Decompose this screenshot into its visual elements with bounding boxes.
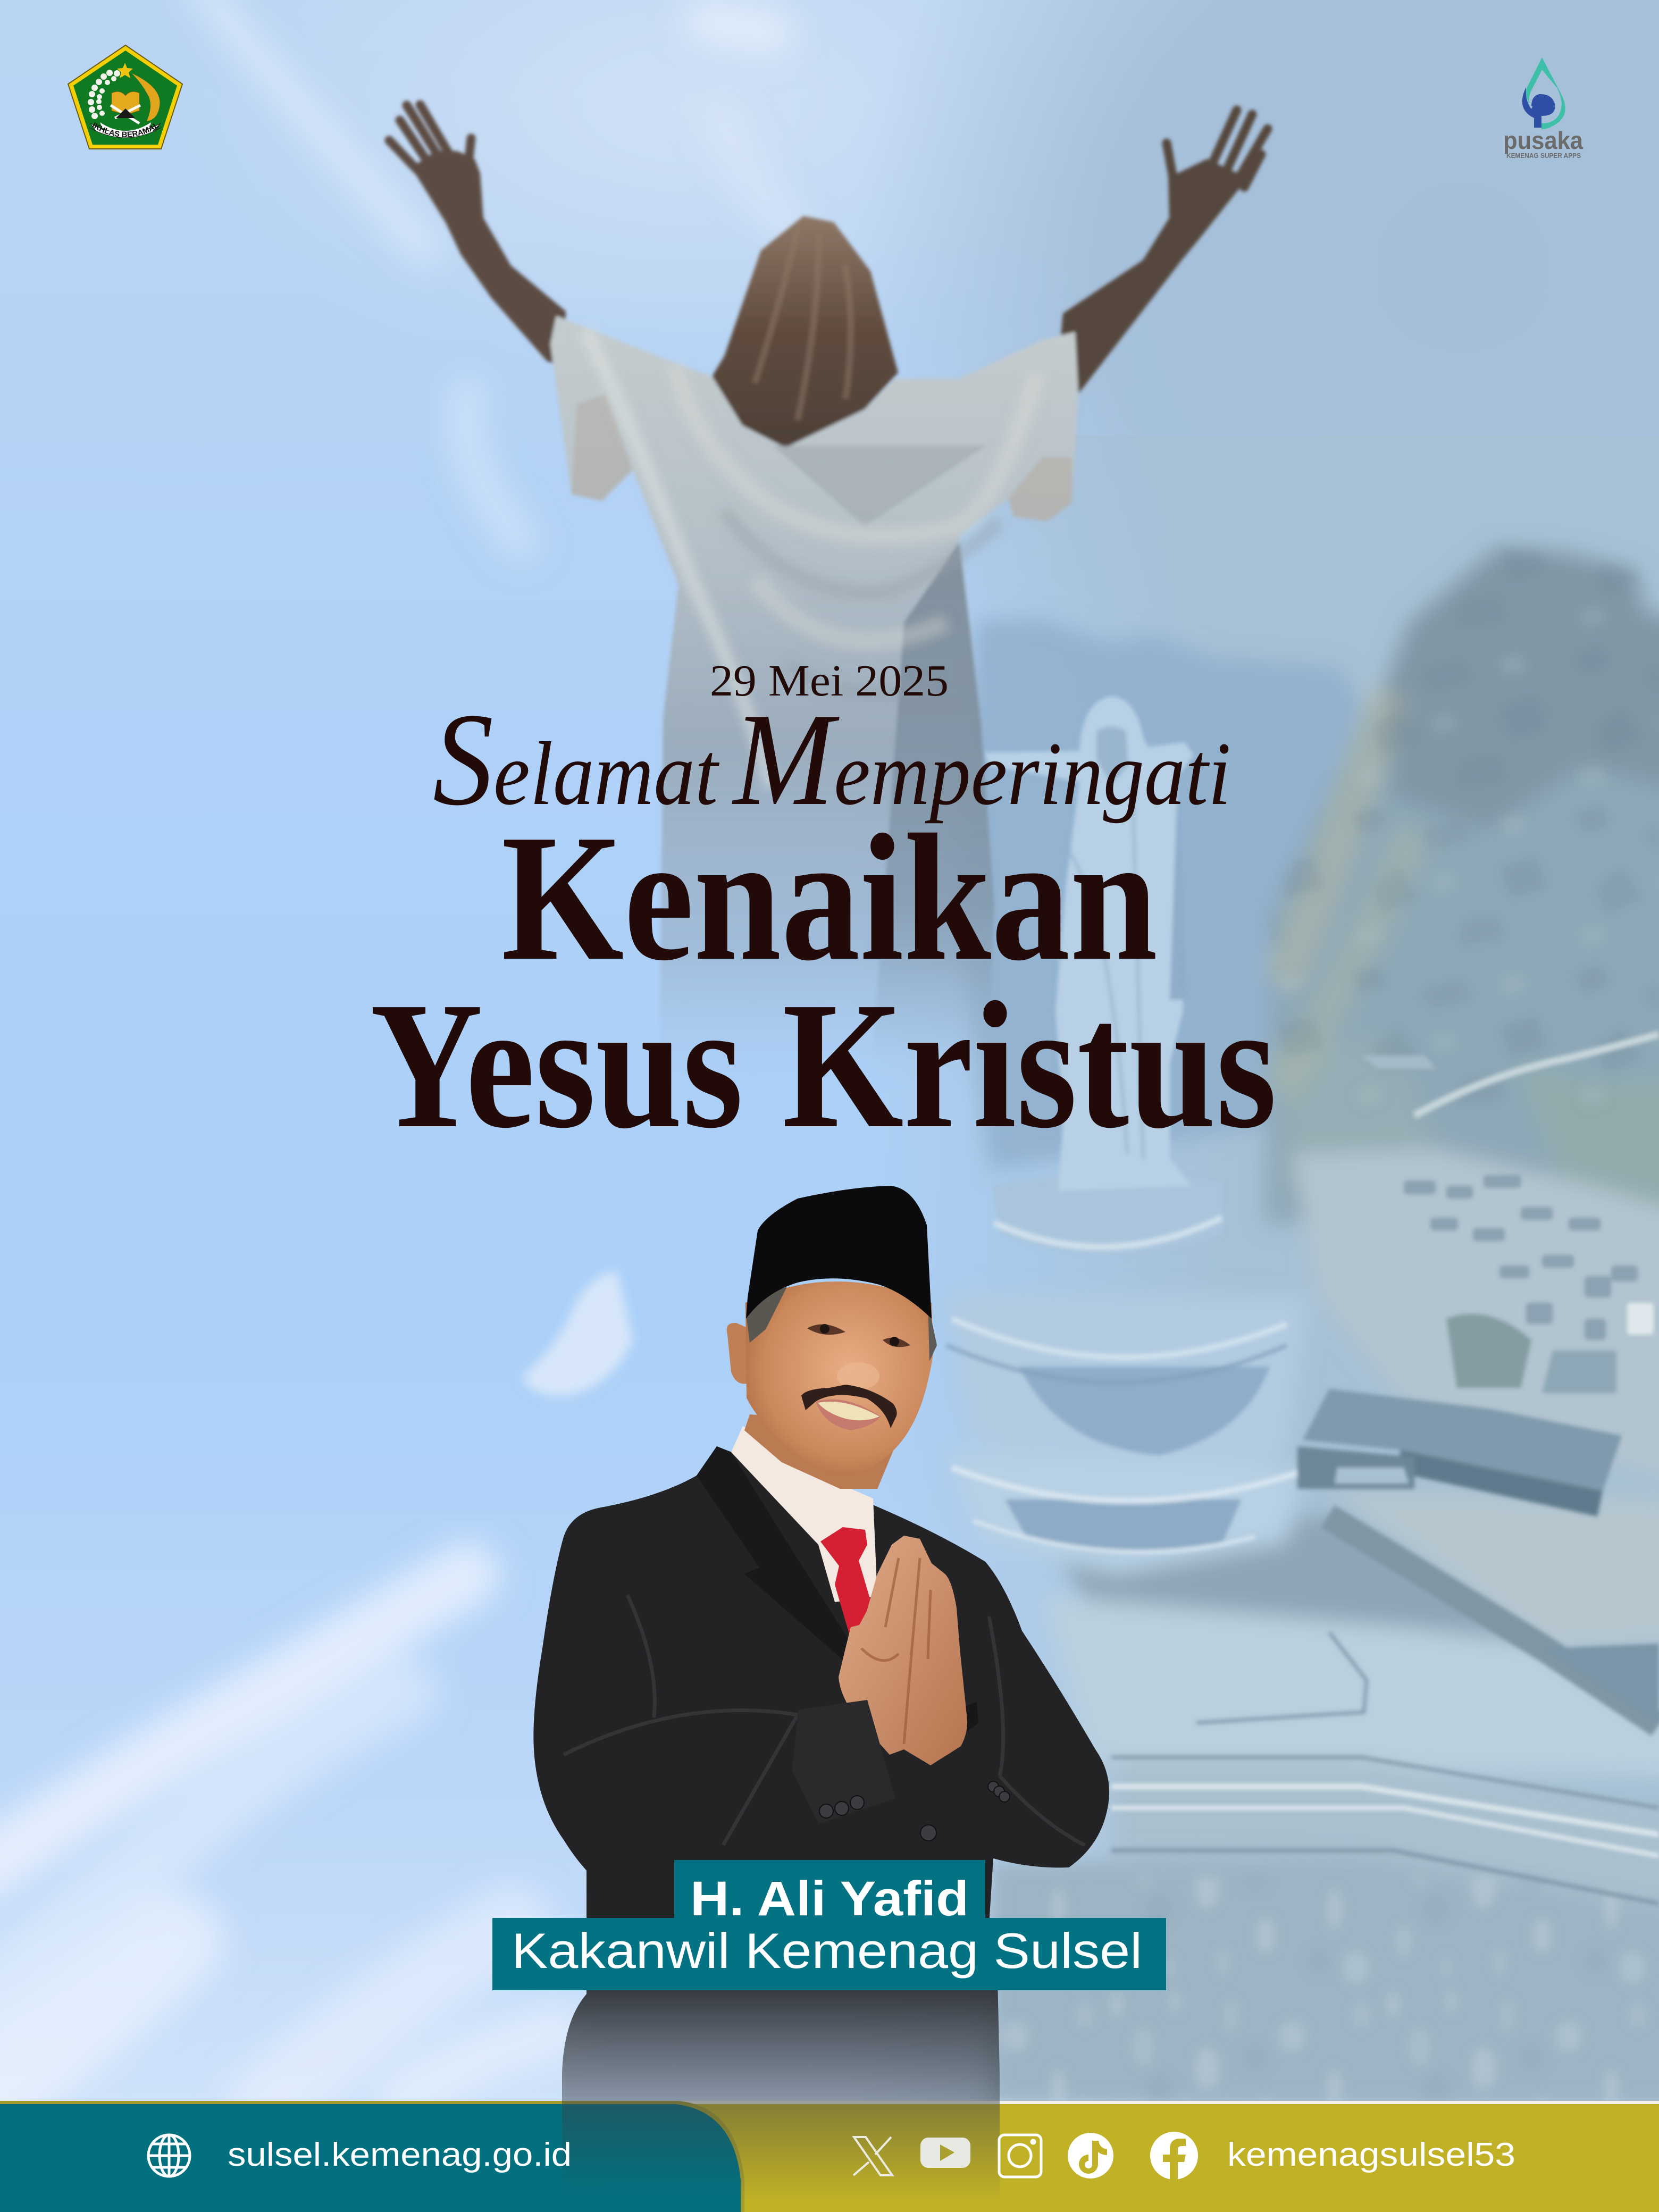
cap	[746, 1186, 932, 1319]
title: Yesus Kristus	[370, 964, 1277, 1166]
clouds at the bottom left	[0, 1574, 558, 2106]
script heading	[433, 686, 1231, 833]
name tag	[674, 1860, 985, 1926]
jacket cuff	[792, 1700, 895, 1824]
head	[727, 1186, 937, 1476]
raised left arm and hand	[389, 105, 565, 367]
raised right arm and hand	[1058, 110, 1268, 393]
lapel	[697, 1446, 851, 1662]
logo: Kementerian Agama emblem: IKHLAS BERAMAL	[92, 122, 160, 137]
sleeve folds	[564, 1595, 1085, 1845]
landscape details: road, town, statue base, plaza, rails	[946, 696, 1659, 1904]
robe folds	[585, 330, 1037, 787]
role tag	[492, 1918, 1166, 1990]
script heading: Memperingati	[732, 686, 1231, 833]
faded lower suit	[562, 1856, 1000, 2201]
logo: Pusaka super apps: pusaka	[1503, 127, 1583, 154]
date: 29 Mei 2025	[710, 656, 949, 706]
icon: Facebook	[1150, 2132, 1198, 2180]
script heading: Selamat	[433, 686, 719, 833]
mustache	[801, 1385, 897, 1428]
necktie	[820, 1527, 871, 1639]
jacket	[533, 1446, 1109, 1925]
title	[370, 797, 1277, 1166]
footer bar	[0, 2101, 1659, 2212]
name tag: H. Ali Yafid	[690, 1872, 969, 1926]
title: Kenaikan	[501, 797, 1158, 998]
nose highlight	[837, 1362, 879, 1390]
neck	[744, 1414, 904, 1489]
mottled rock and foliage texture	[989, 548, 1659, 2103]
icon: globe	[148, 2135, 190, 2176]
logo: Pusaka super apps: KEMENAG SUPER APPS	[1506, 152, 1581, 160]
logo: Kementerian Agama emblem	[67, 45, 183, 149]
shirt collar	[731, 1426, 877, 1602]
smile	[816, 1400, 881, 1430]
portrait of H. Ali Yafid	[533, 1186, 1109, 2201]
icon: Instagram	[999, 2135, 1041, 2177]
clouds at the top	[202, 0, 787, 542]
robe	[550, 316, 1078, 1090]
icon: TikTok	[1068, 2133, 1113, 2179]
small cloud beside the portrait	[522, 1271, 633, 1396]
hair	[712, 216, 898, 448]
eyes	[807, 1324, 845, 1335]
hands in greeting	[839, 1536, 967, 1765]
landscape: hills, mountain and rainbow tones	[945, 548, 1659, 2106]
social handle: kemenagsulsel53	[1227, 2136, 1515, 2173]
logo: Pusaka super apps	[1503, 57, 1583, 160]
watch	[920, 1702, 978, 1763]
figure of Jesus seen from behind	[389, 105, 1268, 1090]
website: sulsel.kemenag.go.id	[228, 2136, 572, 2173]
role tag: Kakanwil Kemenag Sulsel	[512, 1923, 1142, 1979]
icon: X	[853, 2137, 892, 2175]
buttons	[819, 1781, 1010, 1841]
icon: YouTube	[920, 2138, 970, 2168]
